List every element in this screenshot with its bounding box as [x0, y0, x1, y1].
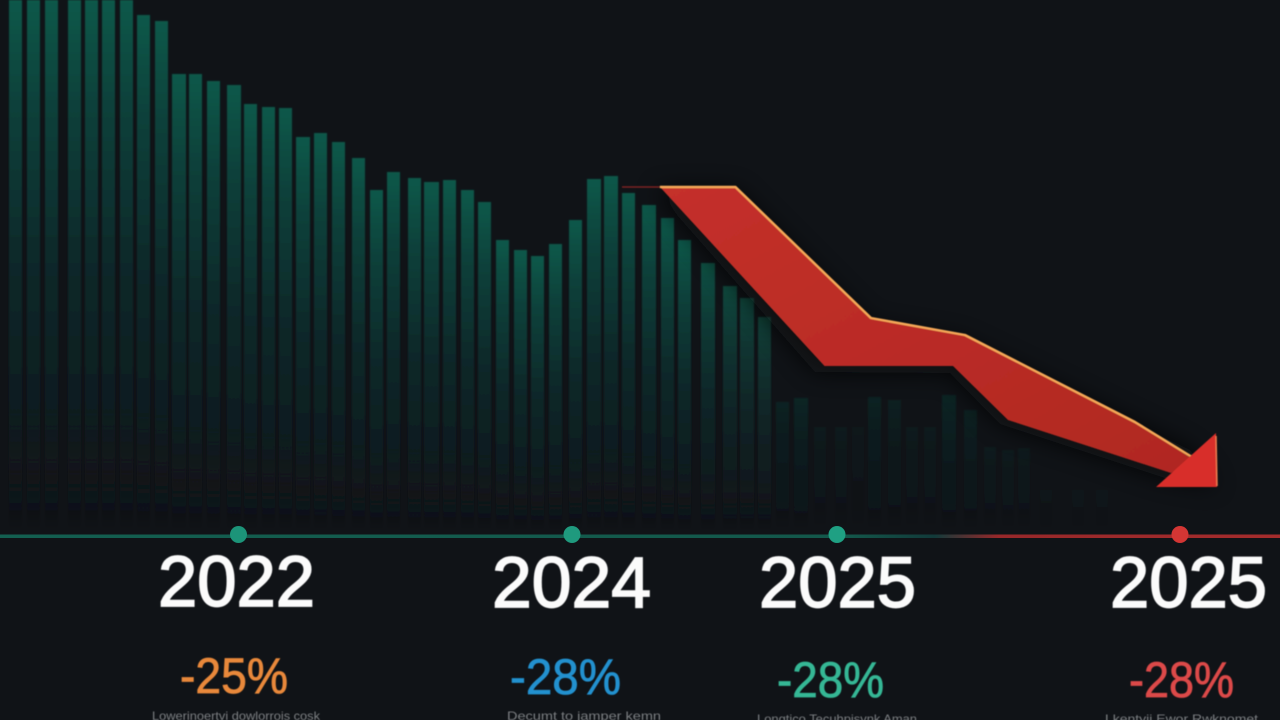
change -25%: -25%: [180, 648, 288, 704]
column: 2022: [152, 543, 321, 720]
arrow lead-in line: [622, 186, 662, 188]
marker 2024: [564, 526, 580, 543]
change -28% blue: -28%: [510, 649, 621, 705]
arrow highlight edge: [660, 187, 1192, 457]
year 2024: 2024: [492, 544, 651, 623]
marker 2025: [828, 526, 846, 543]
change -28% green: -28%: [777, 652, 884, 708]
timeline axis: [0, 534, 1280, 538]
red decline arrow: [622, 187, 1217, 487]
arrow head: [1156, 433, 1217, 487]
column: 2025 red: [1105, 544, 1267, 720]
timeline markers: [230, 526, 1188, 543]
column: 2025: [757, 544, 917, 720]
year 2025: 2025: [759, 544, 916, 623]
arrow shadow: [655, 190, 1217, 487]
year 2025: 2025: [1110, 544, 1267, 623]
marker 2025 red: [1172, 526, 1188, 543]
bar chart: [9, 0, 1108, 530]
arrow body: [660, 187, 1194, 473]
marker 2022: [230, 526, 247, 543]
change -28% red: -28%: [1129, 652, 1234, 708]
column: 2024: [492, 544, 661, 720]
arrow head edge: [1216, 436, 1217, 486]
year 2022: 2022: [158, 543, 315, 622]
